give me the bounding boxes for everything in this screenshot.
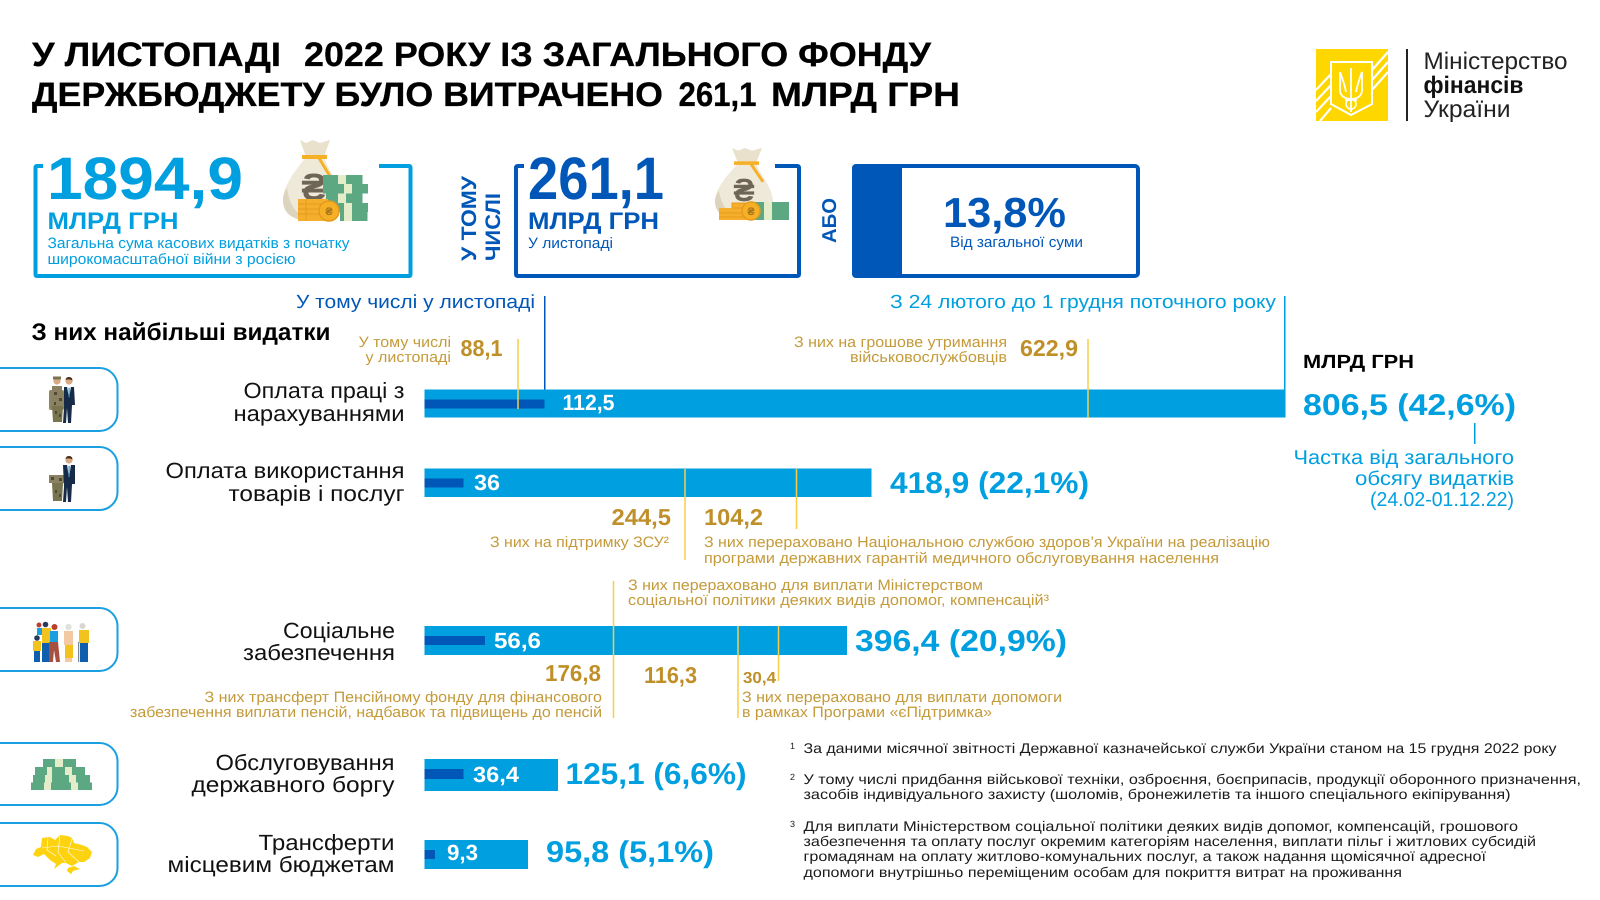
footnote 3: громадянам на оплату житлово-комунальних послуг, а також надання щомісячної адресної xyxy=(804,848,1486,864)
note: health service xyxy=(704,504,1270,567)
icon box: family xyxy=(0,608,118,671)
category label xyxy=(192,750,394,797)
row: transfers to local budgets xyxy=(0,823,714,886)
uniform xyxy=(49,475,65,501)
legend: from 24 February: З 24 лютого до 1 грудня поточного року xyxy=(890,292,1277,313)
note: military pay: З них на грошове утримання xyxy=(794,334,1007,351)
note: health service: З них перераховано Національною службою здоров’я України на реалізацію xyxy=(704,534,1270,551)
panel: november expenditure xyxy=(516,145,799,276)
icon: small money bag: ₴ xyxy=(747,206,755,218)
category label: Оплата праці з xyxy=(244,378,404,403)
note: pension fund: З них трансферт Пенсійному фонду для фінансового xyxy=(204,689,602,706)
title: МЛРД ГРН xyxy=(771,76,960,114)
description xyxy=(48,235,350,268)
bar: transfers xyxy=(424,840,528,869)
icon: small money bag: ₴ xyxy=(733,172,755,208)
footnote 2: засобів індивідуального захисту (шоломів, бронежилетів та іншого спеціального екіпірування) xyxy=(804,786,1510,802)
bar: goods and services xyxy=(424,468,872,560)
footnote 3: 3 xyxy=(790,819,795,829)
category label xyxy=(243,618,395,665)
footnote 3 xyxy=(790,818,1536,880)
child xyxy=(33,635,41,662)
note: share of total xyxy=(1294,423,1514,511)
note: armed forces support: 244,5 xyxy=(612,504,671,530)
category label: Оплата використання xyxy=(166,458,404,483)
logo text: Міністерство xyxy=(1424,48,1568,75)
bar: public debt service xyxy=(424,759,558,791)
footnote 1: 1 xyxy=(790,741,795,751)
category label xyxy=(166,458,404,506)
note: military pay: 622,9 xyxy=(1020,335,1078,361)
title: ДЕРЖБЮДЖЕТУ БУЛО ВИТРАЧЕНО xyxy=(32,76,663,114)
note: November portion: у листопаді xyxy=(366,349,451,366)
category label xyxy=(234,378,404,426)
icon: money bag with banknotes and coins: ₴ xyxy=(301,167,327,209)
unit: МЛРД ГРН xyxy=(48,208,178,235)
bar: goods and services: 36 xyxy=(474,470,500,495)
description: Загальна сума касових видатків з початку xyxy=(48,235,350,252)
footnote 3: забезпечення та оплату послуг окремим категоріям населення, виплати пільг і житлових субсидій xyxy=(804,833,1536,849)
note: November portion: У тому числі xyxy=(358,334,451,351)
note: pension fund: 176,8 xyxy=(545,660,601,686)
note: armed forces support xyxy=(490,504,671,551)
icon: small money bag xyxy=(715,148,789,220)
figure: ministry amount: 116,3 xyxy=(644,662,697,688)
unit: МЛРД ГРН xyxy=(528,208,659,235)
icon box: stacks of banknotes xyxy=(0,743,118,805)
title xyxy=(32,36,960,114)
icon box: soldier and official xyxy=(0,368,118,431)
value: public debt service: 125,1 (6,6%) xyxy=(566,758,746,791)
unit label: МЛРД ГРН xyxy=(1303,352,1414,373)
footnote 2 xyxy=(790,771,1581,802)
icon: money bag with banknotes and coins xyxy=(283,140,368,221)
category label: Соціальне xyxy=(283,618,395,643)
legend: in November: У тому числі у листопаді xyxy=(296,292,535,313)
footnote 2: У тому числі придбання військової техніки, озброєння, боєприпасів, продукції оборонного призначення, xyxy=(804,771,1581,787)
note: eSupport programme: в рамках Програми «єПідтримка» xyxy=(742,704,992,721)
note: share of total: Частка від загального xyxy=(1294,447,1514,469)
grandmother xyxy=(64,624,73,662)
value: transfers: 95,8 (5,1%) xyxy=(546,836,714,869)
icon box: map of Ukraine xyxy=(0,823,118,886)
note: health service: 104,2 xyxy=(704,504,763,530)
mother xyxy=(49,624,60,662)
bar: social security xyxy=(424,581,847,718)
father with toddler xyxy=(36,622,51,662)
label: including xyxy=(458,175,505,261)
icon: yellow emblem with trident xyxy=(1316,49,1388,121)
row: wages xyxy=(0,334,1516,511)
note: Ministry of Social Policy: соціальної політики деяких видів допомог, компенсацій³ xyxy=(628,592,1049,609)
title: 261,1 xyxy=(678,76,756,114)
note: share of total: (24.02-01.12.22) xyxy=(1370,489,1514,511)
bar: public debt service: 36,4 xyxy=(473,762,520,787)
logo text: фінансів xyxy=(1424,72,1524,99)
title: 2022 РОКУ ІЗ ЗАГАЛЬНОГО ФОНДУ xyxy=(304,36,932,74)
bar: social security: 56,6 xyxy=(494,628,541,653)
footnote 3: Для виплати Міністерством соціальної політики деяких видів допомог, компенсацій, грошового xyxy=(804,818,1518,834)
footnote 2: 2 xyxy=(790,772,795,782)
description: широкомасштабної війни з росією xyxy=(48,251,296,268)
bar: wages: 112,5 xyxy=(562,390,614,415)
value: wages: 806,5 (42,6%) xyxy=(1303,389,1516,422)
note: pension fund xyxy=(130,660,602,721)
note: eSupport programme xyxy=(742,670,1062,721)
footnote 1: За даними місячної звітності Державної казначейської служби України станом на 15 грудня 2022 року xyxy=(804,740,1556,756)
note: military pay xyxy=(794,334,1078,366)
row: social security xyxy=(0,577,1067,721)
note: Ministry of Social Policy xyxy=(628,577,1049,609)
note: armed forces support: З них на підтримку ЗСУ² xyxy=(490,534,669,551)
official xyxy=(63,456,75,502)
row: goods and services xyxy=(0,447,1270,567)
share figure: 13,8% xyxy=(943,189,1066,236)
share caption: Від загальної суми xyxy=(950,234,1083,251)
note: health service: програми державних гарантій медичного обслуговування населення xyxy=(704,550,1219,567)
note: military pay: військовослужбовців xyxy=(850,349,1007,366)
grandfather xyxy=(78,623,89,662)
footnotes xyxy=(790,740,1581,880)
note: eSupport programme: З них перераховано для виплати допомоги xyxy=(742,689,1062,706)
row: public debt service xyxy=(0,743,746,805)
logo text xyxy=(1424,48,1568,123)
section heading: З них найбільші видатки xyxy=(32,319,331,346)
category label: Обслуговування xyxy=(216,750,394,775)
note: eSupport programme: 30,4 xyxy=(743,670,776,687)
category label: товарів і послуг xyxy=(228,481,404,506)
footnote 3: допомоги внутрішньо переміщеним особам для покриття витрат на проживання xyxy=(804,864,1402,880)
value: social security: 396,4 (20,9%) xyxy=(855,625,1067,658)
value: goods and services: 418,9 (22,1%) xyxy=(890,467,1089,500)
icon: money bag with banknotes and coins: ₴ xyxy=(325,206,333,218)
icon box: uniform and official xyxy=(0,447,118,510)
label: or: АБО xyxy=(819,198,841,243)
category label: нарахуваннями xyxy=(234,401,404,426)
november figure: 261,1 xyxy=(528,145,664,212)
label: including: У ТОМУ xyxy=(458,175,481,261)
panel: share of total xyxy=(852,164,1138,278)
category label: забезпечення xyxy=(243,640,395,665)
note: share of total: обсягу видатків xyxy=(1355,468,1514,490)
note: November portion: 88,1 xyxy=(460,335,503,361)
note: pension fund: забезпечення виплати пенсій, надбавок та підвищень до пенсій xyxy=(130,704,602,721)
logo: Ministry of Finance of Ukraine xyxy=(1316,48,1568,123)
note: November portion xyxy=(358,334,503,366)
description: У листопаді xyxy=(528,235,613,252)
bar: wages xyxy=(424,339,1286,418)
total figure: 1894,9 xyxy=(47,145,243,212)
category label: Трансферти xyxy=(258,830,394,855)
label: including: ЧИСЛІ xyxy=(482,193,505,261)
category label: державного боргу xyxy=(192,772,394,797)
soldier xyxy=(49,376,64,422)
title: У ЛИСТОПАДІ xyxy=(32,36,281,74)
category label: місцевим бюджетам xyxy=(168,852,394,877)
bar: transfers: 9,3 xyxy=(447,840,478,865)
official xyxy=(63,377,75,423)
category label xyxy=(168,830,394,877)
note: Ministry of Social Policy: З них перераховано для виплати Міністерством xyxy=(628,577,983,594)
panel: total expenditure xyxy=(36,140,410,276)
logo text: України xyxy=(1424,96,1510,123)
